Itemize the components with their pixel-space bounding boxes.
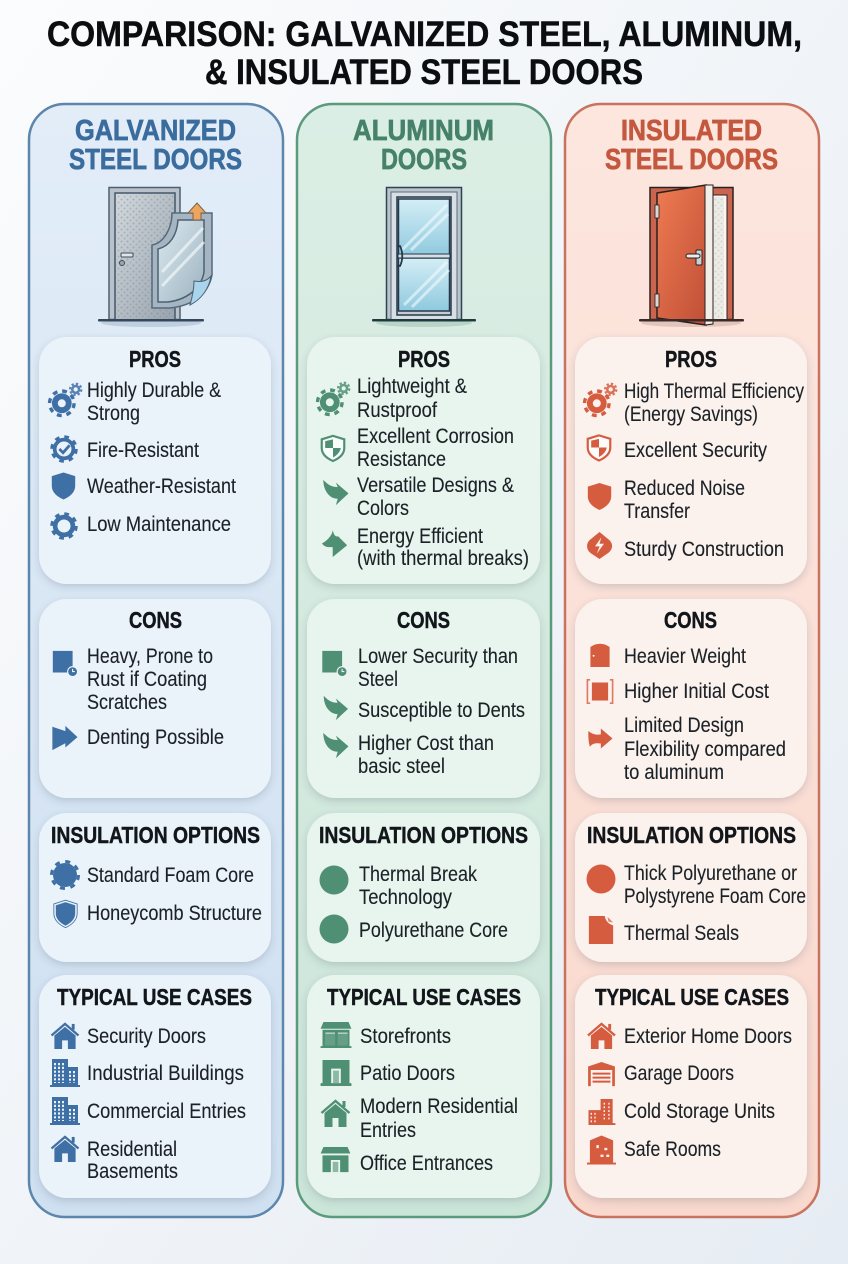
item: limited design flexibility: Limited Design <box>624 714 744 737</box>
item: thermal break technology: Technology <box>359 886 452 909</box>
item: modern residential entries: Entries <box>360 1119 416 1142</box>
item: fire-resistant: Fire-Resistant <box>87 439 199 462</box>
item: lower security: Steel <box>358 668 398 691</box>
item: safe rooms <box>587 1136 721 1164</box>
item: heavy, prone to rust: Rust if Coating <box>87 668 207 691</box>
item: thick foam core <box>586 862 806 908</box>
item: excellent corrosion resistance: Excellent Corrosion <box>357 425 514 448</box>
item: sturdy construction <box>587 532 784 561</box>
item: susceptible to dents <box>324 696 525 722</box>
item: office entrances: Office Entrances <box>360 1152 493 1175</box>
item: excellent corrosion resistance <box>322 425 514 471</box>
illustration: galvanized door with peeling coating <box>98 188 212 327</box>
item: higher cost: basic steel <box>358 755 445 778</box>
panel: aluminum doors <box>297 104 551 1217</box>
item: lower security <box>322 645 518 691</box>
heading: aluminum doors: ALUMINUM <box>353 115 494 147</box>
item: high thermal efficiency: High Thermal Efficiency <box>624 380 804 403</box>
item: industrial buildings: Industrial Buildings <box>87 1062 244 1085</box>
item: modern residential entries <box>322 1095 518 1142</box>
card: insulation options <box>575 813 807 962</box>
illustration: aluminum glass door <box>372 188 476 327</box>
item: fire-resistant <box>52 437 199 462</box>
item: garage doors <box>588 1062 734 1086</box>
item: residential basements: Basements <box>87 1160 178 1183</box>
item: heavier weight: Heavier Weight <box>624 645 746 668</box>
heading: insulated steel doors: STEEL DOORS <box>605 144 778 176</box>
item: low maintenance <box>52 513 231 538</box>
card: typical use cases <box>39 975 271 1198</box>
item: denting possible <box>52 726 224 750</box>
item: energy efficient: Energy Efficient <box>357 525 483 548</box>
item: limited design flexibility <box>588 714 786 784</box>
heading: pros: PROS <box>129 346 181 372</box>
card: pros <box>575 337 807 584</box>
item: energy efficient: (with thermal breaks) <box>357 547 529 570</box>
item: heavy, prone to rust: Scratches <box>87 691 167 714</box>
item: lower security: Lower Security than <box>358 645 518 668</box>
panel: galvanized steel doors <box>29 104 283 1217</box>
item: highly durable and strong: Highly Durable & <box>87 379 221 402</box>
item: versatile designs and colors <box>323 474 514 520</box>
item: excellent security <box>588 435 767 462</box>
item: reduced noise transfer: Transfer <box>624 500 690 523</box>
item: residential basements: Residential <box>87 1138 177 1161</box>
item: honeycomb structure <box>54 900 262 928</box>
item: heavier weight <box>590 644 746 668</box>
panel: insulated steel doors <box>565 104 819 1217</box>
item: limited design flexibility: to aluminum <box>624 761 724 784</box>
item: weather-resistant: Weather-Resistant <box>87 475 236 498</box>
item: denting possible: Denting Possible <box>87 726 224 749</box>
item: commercial entries: Commercial Entries <box>87 1100 246 1123</box>
item: heavy, prone to rust: Heavy, Prone to <box>87 645 213 668</box>
card: typical use cases <box>575 975 807 1198</box>
item: security doors: Security Doors <box>87 1025 206 1048</box>
item: limited design flexibility: Flexibility compared <box>624 738 786 761</box>
item: storefronts: Storefronts <box>360 1025 451 1048</box>
item: standard foam core <box>52 862 254 888</box>
item: industrial buildings <box>50 1059 244 1087</box>
item: low maintenance: Low Maintenance <box>87 513 231 536</box>
item: thick foam core: Thick Polyurethane or <box>624 862 797 885</box>
item: cold storage units: Cold Storage Units <box>624 1100 775 1123</box>
column frame blue <box>29 104 283 1217</box>
card: insulation options <box>307 813 540 962</box>
heading: insulated steel doors: INSULATED <box>621 115 762 147</box>
item: thermal break technology: Thermal Break <box>359 863 477 886</box>
column frame red <box>565 104 819 1217</box>
item: excellent security: Excellent Security <box>624 439 767 462</box>
item: energy efficient <box>322 525 529 570</box>
heading: cons: CONS <box>664 607 717 633</box>
item: security doors <box>52 1024 206 1049</box>
item: patio doors <box>321 1060 455 1086</box>
item: commercial entries <box>50 1097 246 1125</box>
item: higher cost <box>323 732 494 778</box>
card: cons <box>39 599 271 798</box>
item: thick foam core: Polystyrene Foam Core <box>624 885 806 908</box>
card: insulation options <box>39 813 271 962</box>
heading: typical use cases: TYPICAL USE CASES <box>57 984 252 1010</box>
card: cons <box>307 599 540 798</box>
item: reduced noise transfer: Reduced Noise <box>624 477 745 500</box>
item: cold storage units <box>588 1099 775 1125</box>
item: higher cost: Higher Cost than <box>358 732 494 755</box>
heading: galvanized steel doors <box>69 115 242 176</box>
item: high thermal efficiency: (Energy Savings) <box>624 403 758 426</box>
item: exterior home doors <box>588 1024 792 1049</box>
card: cons <box>575 599 807 798</box>
title <box>47 15 802 92</box>
heading: cons: CONS <box>129 607 182 633</box>
item: lightweight and rustproof: Lightweight & <box>357 375 467 398</box>
card: pros <box>39 337 271 584</box>
item: sturdy construction: Sturdy Construction <box>624 538 784 561</box>
item: reduced noise transfer <box>588 477 745 523</box>
heading: galvanized steel doors: GALVANIZED <box>75 115 236 147</box>
column frame green <box>297 104 551 1217</box>
item: honeycomb structure: Honeycomb Structure <box>87 902 262 925</box>
heading: typical use cases: TYPICAL USE CASES <box>327 984 521 1010</box>
item: thermal seals <box>589 916 739 945</box>
item: garage doors: Garage Doors <box>624 1062 734 1085</box>
title: & INSULATED STEEL DOORS <box>205 53 643 92</box>
item: polyurethane core <box>320 914 508 944</box>
illustration: open insulated door <box>639 185 744 327</box>
item: lightweight and rustproof: Rustproof <box>357 399 437 422</box>
item: weather-resistant <box>52 472 236 500</box>
heading: typical use cases: TYPICAL USE CASES <box>595 984 789 1010</box>
item: lightweight and rustproof <box>318 375 467 422</box>
item: high thermal efficiency <box>585 380 804 426</box>
item: higher initial cost: Higher Initial Cost <box>624 680 769 703</box>
item: storefronts <box>321 1022 451 1048</box>
item: susceptible to dents: Susceptible to Dents <box>358 699 525 722</box>
card: pros <box>307 337 540 584</box>
item: thermal seals: Thermal Seals <box>624 922 739 945</box>
heading: insulated steel doors <box>605 115 778 176</box>
heading: galvanized steel doors: STEEL DOORS <box>69 144 242 176</box>
item: residential basements <box>52 1137 178 1183</box>
item: highly durable and strong: Strong <box>87 402 140 425</box>
heading: pros: PROS <box>398 346 450 372</box>
heading: aluminum doors <box>353 115 494 176</box>
item: patio doors: Patio Doors <box>360 1062 455 1085</box>
item: office entrances <box>321 1147 493 1175</box>
heading: insulation options: INSULATION OPTIONS <box>319 822 528 848</box>
item: highly durable and strong <box>50 379 221 425</box>
item: heavy, prone to rust <box>53 645 213 714</box>
item: safe rooms: Safe Rooms <box>624 1138 721 1161</box>
item: standard foam core: Standard Foam Core <box>87 864 254 887</box>
item: versatile designs and colors: Colors <box>357 497 409 520</box>
item: modern residential entries: Modern Residential <box>360 1095 518 1118</box>
item: versatile designs and colors: Versatile Designs & <box>357 474 514 497</box>
item: excellent corrosion resistance: Resistance <box>357 448 446 471</box>
heading: insulation options: INSULATION OPTIONS <box>587 822 796 848</box>
heading: pros: PROS <box>665 346 717 372</box>
heading: insulation options: INSULATION OPTIONS <box>51 822 260 848</box>
item: polyurethane core: Polyurethane Core <box>359 919 508 942</box>
title: COMPARISON: GALVANIZED STEEL, ALUMINUM, <box>47 15 802 54</box>
item: thermal break technology <box>320 863 477 909</box>
card: typical use cases <box>307 975 540 1198</box>
heading: aluminum doors: DOORS <box>381 144 467 176</box>
heading: cons: CONS <box>397 607 450 633</box>
item: exterior home doors: Exterior Home Doors <box>624 1025 792 1048</box>
